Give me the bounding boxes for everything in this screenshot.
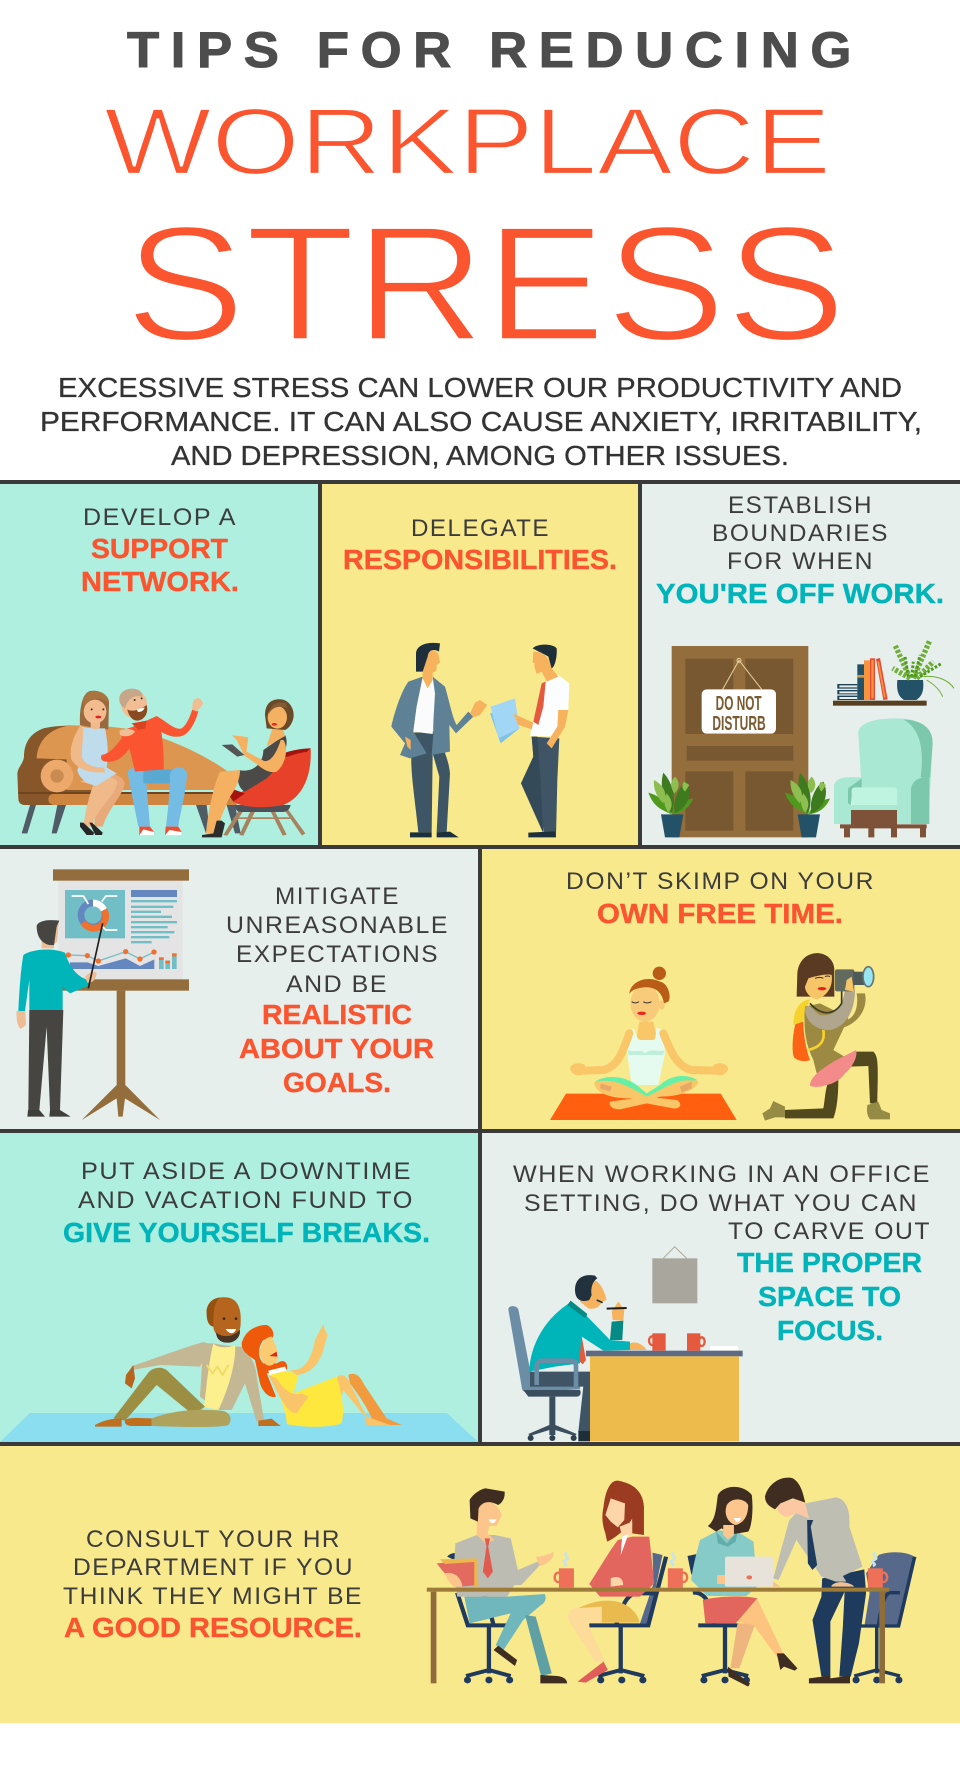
chair one <box>447 1553 511 1676</box>
panel text: TO CARVE OUT <box>728 1218 931 1245</box>
panel text <box>226 883 449 1098</box>
man leaning over <box>765 1478 866 1683</box>
man relaxing <box>95 1297 281 1427</box>
panel background <box>322 484 638 845</box>
panel text: UNREASONABLE <box>226 912 449 939</box>
panel text: DEVELOP A <box>83 504 237 531</box>
illustration: team meeting at a table <box>427 1478 915 1687</box>
panel text: AND VACATION FUND TO <box>78 1187 414 1214</box>
plant right <box>785 773 830 837</box>
panel text: RESPONSIBILITIES. <box>343 544 617 575</box>
illustration: man working at a desk <box>508 1247 743 1441</box>
panel background <box>0 1446 960 1723</box>
illustration: presenter at a chart board <box>16 869 189 1120</box>
door <box>672 646 808 837</box>
panel text: EXPECTATIONS <box>236 941 439 968</box>
panel text: REALISTIC <box>262 999 412 1030</box>
panel text: DELEGATE <box>411 515 550 542</box>
door sign: do not disturb <box>702 658 776 735</box>
panel text <box>343 515 617 575</box>
illustration: woman meditating on a mat <box>550 967 737 1120</box>
meeting table <box>427 1588 889 1683</box>
illustration: couple relaxing on a blanket <box>0 1297 478 1442</box>
panel text: BOUNDARIES <box>712 520 889 547</box>
man with document <box>437 1488 567 1683</box>
panel background <box>642 484 960 845</box>
panel text <box>81 504 239 597</box>
panel: don't skimp on free time <box>482 849 960 1129</box>
chair two <box>589 1553 666 1683</box>
wall frame <box>652 1247 697 1303</box>
panel text: SUPPORT <box>91 533 228 564</box>
presenter <box>16 920 103 1117</box>
panel text: AND BE <box>286 971 388 998</box>
illustration: door with sign, plants, shelf and armchair <box>648 640 954 837</box>
title line: tips for reducing: TIPS FOR REDUCING <box>127 22 863 78</box>
panel text: OWN FREE TIME. <box>597 898 843 929</box>
panel: mitigate unreasonable expectations <box>0 849 478 1129</box>
woman in coral jacket <box>568 1481 654 1683</box>
panel text: ESTABLISH <box>728 492 873 519</box>
blanket <box>0 1413 478 1442</box>
door sign: do not disturb: DO NOT <box>716 692 762 715</box>
office chair <box>508 1306 581 1441</box>
panel text <box>513 1161 931 1346</box>
title <box>104 22 863 375</box>
panel text: THINK THEY MIGHT BE <box>63 1583 363 1610</box>
panel: establish boundaries <box>642 484 960 845</box>
panel text: YOU'RE OFF WORK. <box>656 578 944 609</box>
title line: stress: STRESS <box>125 192 846 375</box>
panel text: DON’T SKIMP ON YOUR <box>566 868 875 895</box>
panel text: GOALS. <box>283 1067 391 1098</box>
panel text <box>656 492 944 609</box>
grid frame lines <box>0 480 960 1446</box>
panel text <box>63 1526 363 1643</box>
panel text: A GOOD RESOURCE. <box>64 1612 362 1643</box>
mug three <box>868 1553 887 1588</box>
panel text: WHEN WORKING IN AN OFFICE <box>513 1161 931 1188</box>
panel text: FOCUS. <box>777 1315 883 1346</box>
panel text: DEPARTMENT IF YOU <box>73 1554 354 1581</box>
panel: carve out space to focus <box>482 1133 960 1442</box>
desk with mugs <box>586 1333 743 1441</box>
panel: give yourself breaks <box>0 1133 478 1442</box>
intro text block: EXCESSIVE STRESS CAN LOWER OUR PRODUCTIVITY AND <box>58 372 902 403</box>
illustration: man with papers <box>490 645 569 837</box>
chair four <box>852 1552 915 1683</box>
worker <box>529 1275 647 1441</box>
panel: delegate responsibilities <box>322 484 638 845</box>
panel background <box>0 849 478 1129</box>
panel text: CONSULT YOUR HR <box>86 1526 341 1553</box>
illustration: friends on a sofa <box>17 689 311 837</box>
shelf with books and fern <box>833 640 954 706</box>
panel text: THE PROPER <box>737 1247 922 1278</box>
panel text: SETTING, DO WHAT YOU CAN <box>524 1190 918 1217</box>
intro text block <box>40 372 922 471</box>
illustration: man in jacket <box>391 643 487 837</box>
chart board <box>53 869 189 1120</box>
panel background <box>0 484 318 845</box>
panel text: ABOUT YOUR <box>239 1033 434 1064</box>
panel text: FOR WHEN <box>727 548 874 575</box>
door sign: do not disturb: DISTURB <box>712 712 766 735</box>
panel text <box>63 1158 430 1248</box>
intro text block: AND DEPRESSION, AMONG OTHER ISSUES. <box>171 440 789 471</box>
panel text: PUT ASIDE A DOWNTIME <box>81 1158 412 1185</box>
title line: workplace: WORKPLACE <box>104 89 831 195</box>
plant left <box>648 773 693 837</box>
panel text: MITIGATE <box>275 883 400 910</box>
panel text: SPACE TO <box>758 1281 901 1312</box>
mug one <box>555 1553 574 1588</box>
panel background <box>0 1133 478 1442</box>
panel text <box>566 868 875 929</box>
intro text block: PERFORMANCE. IT CAN ALSO CAUSE ANXIETY, IRRITABILITY, <box>40 406 922 437</box>
panel background <box>482 1133 960 1442</box>
illustration: woman with camera <box>762 953 890 1121</box>
panel background <box>482 849 960 1129</box>
woman with laptop <box>691 1487 797 1687</box>
panel: consult your HR <box>0 1446 960 1723</box>
woman relaxing <box>242 1324 402 1427</box>
armchair <box>834 718 933 837</box>
chair three <box>687 1554 750 1683</box>
mug two <box>668 1553 687 1588</box>
panel text: GIVE YOURSELF BREAKS. <box>63 1217 430 1248</box>
panel text: NETWORK. <box>81 566 239 597</box>
panel: develop a support network <box>0 484 318 845</box>
